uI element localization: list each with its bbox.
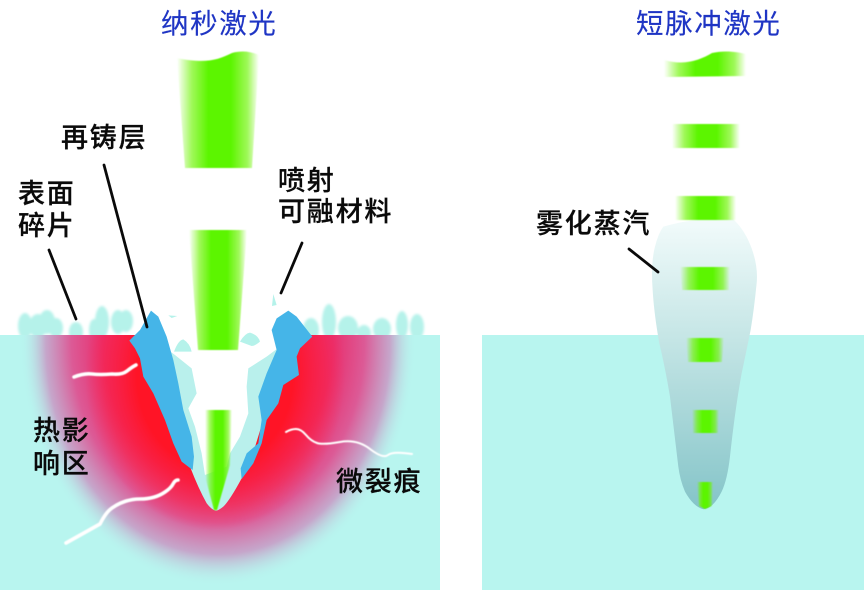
- substrate: left: [0, 335, 440, 590]
- heat affected zone: [28, 335, 408, 576]
- label: vapor: 雾化蒸汽: [536, 209, 651, 239]
- leader lines: [49, 165, 302, 327]
- label: heat affected zone: 响区: [33, 449, 91, 479]
- surface debris: right: [303, 304, 424, 342]
- label: surface debris: 碎片: [18, 211, 76, 241]
- laser beam: tip pulse: [205, 410, 232, 510]
- label: microcracks: 微裂痕: [336, 467, 422, 497]
- label: ejected molten material: 可融材料: [278, 197, 393, 227]
- substrate: right: [482, 335, 864, 590]
- pulses: [664, 51, 746, 509]
- molten white core: [147, 317, 293, 475]
- label: ejected molten material: 喷射: [278, 166, 336, 196]
- recast layer: right: [241, 311, 312, 479]
- label: surface debris: 表面: [18, 179, 76, 209]
- title: short pulse: 短脉冲激光: [636, 8, 782, 39]
- laser beam: top pulse: [177, 52, 259, 168]
- panel: nanosecond laser: [0, 52, 440, 590]
- vapor plume: [652, 219, 757, 509]
- label: heat affected zone: 热影: [33, 416, 91, 446]
- label: recast: 再铸层: [61, 123, 147, 153]
- surface debris: left: [18, 306, 133, 342]
- leader line: [629, 249, 658, 272]
- recast layer: left: [129, 311, 194, 470]
- microcracks: [66, 365, 412, 543]
- title: nanosecond: 纳秒激光: [161, 8, 277, 39]
- panel: short pulse laser: [482, 51, 864, 590]
- spatter droplets: [168, 294, 277, 352]
- laser beam: middle pulse: [189, 230, 247, 350]
- crater: [153, 320, 287, 511]
